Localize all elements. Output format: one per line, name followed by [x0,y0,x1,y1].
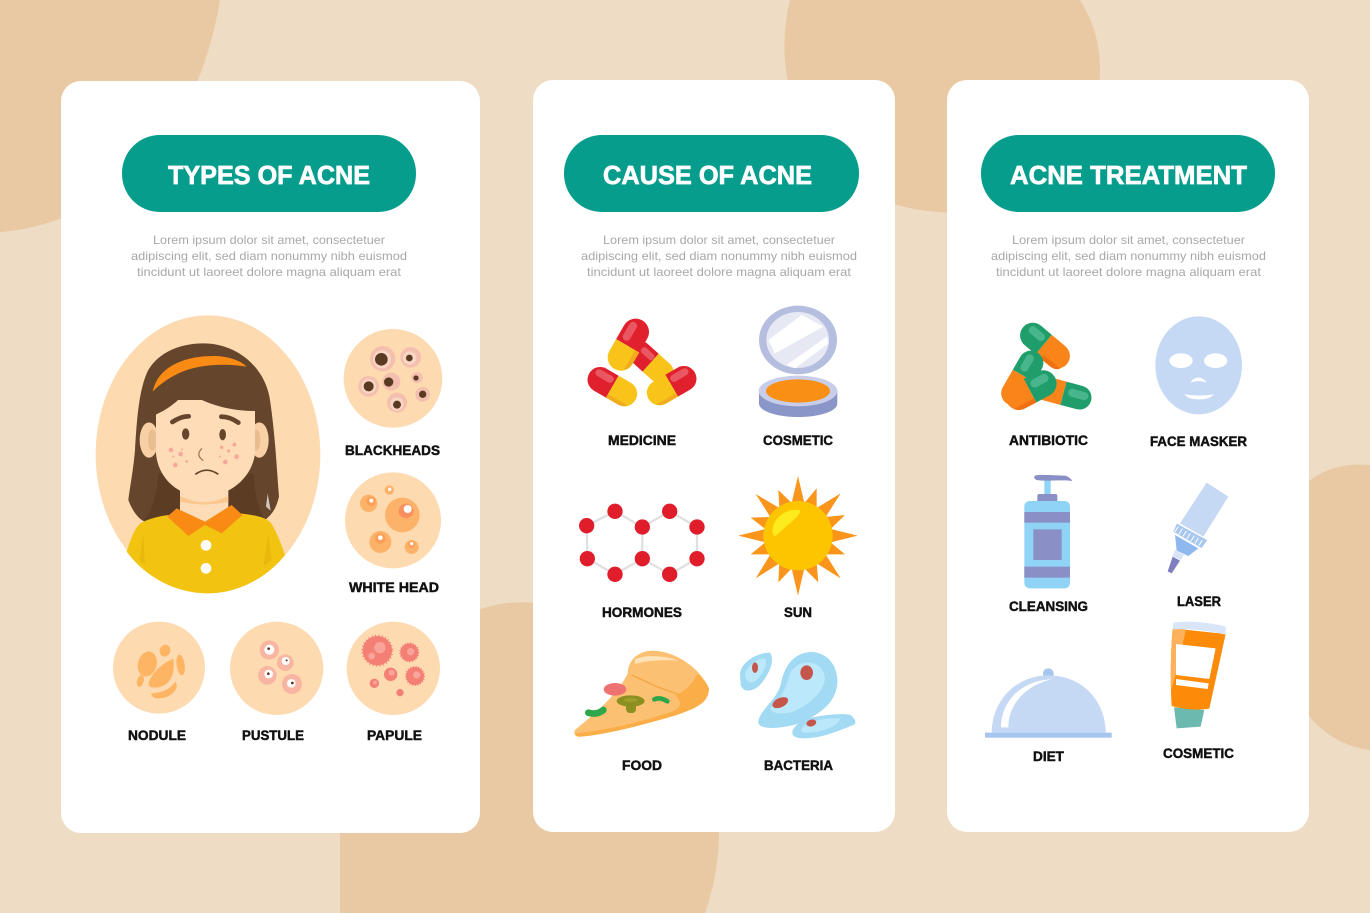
caption: bacteria: BACTERIA [764,758,833,773]
description text: Lorem ipsum dolor sit amet, consectetuer [153,233,385,247]
caption: cosmetic: COSMETIC [763,433,833,448]
description text [131,233,407,279]
caption: diet: DIET [1033,749,1065,764]
caption: medicine: MEDICINE [608,433,676,448]
caption: sun: SUN [784,605,812,620]
icon: pizza slice [574,651,709,737]
heading pill: cause of acne [564,135,859,212]
caption: papule: PAPULE [367,728,422,743]
description text: Lorem ipsum dolor sit amet, consectetuer [1012,233,1245,247]
icon: cleansing bottle [1024,475,1072,588]
caption: food: FOOD [622,758,662,773]
caption: white head: WHITE HEAD [349,580,439,595]
heading pill: cause of acne: CAUSE OF ACNE [603,160,812,190]
panel: types of acne [61,81,480,833]
illustration: girl with acne [96,315,320,593]
icon: medicine capsules [583,314,701,411]
heading pill: acne treatment: ACNE TREATMENT [1010,160,1247,190]
icon: sun [738,476,858,596]
description text [581,233,857,279]
panel: acne treatment [947,80,1309,832]
icon: nodule [113,622,205,714]
icon: hormones molecule [579,504,705,582]
icon: antibiotic capsules [997,318,1094,415]
caption: cosmetic: COSMETIC [1163,746,1234,761]
icon: pustule [230,622,323,715]
icon: blackheads [344,329,442,428]
caption: hormones: HORMONES [602,605,682,620]
caption: blackheads: BLACKHEADS [345,443,440,458]
icon: papule [347,622,440,715]
caption: cleansing: CLEANSING [1009,599,1088,614]
icon: bacteria [740,652,855,738]
description text: adipiscing elit, sed diam nonummy nibh euismod [581,249,857,263]
caption: antibiotic: ANTIBIOTIC [1009,433,1088,448]
description text: Lorem ipsum dolor sit amet, consectetuer [603,233,835,247]
icon: cosmetic tube [1171,622,1226,728]
heading pill: types of acne: TYPES OF ACNE [168,160,370,190]
icon: diet cloche [985,668,1112,738]
icon: laser applicator [1168,483,1228,573]
caption: nodule: NODULE [128,728,186,743]
description text: tincidunt ut laoreet dolore magna aliquam erat [996,265,1262,279]
heading pill: acne treatment [981,135,1275,212]
caption: face masker: FACE MASKER [1150,434,1247,449]
caption: pustule: PUSTULE [242,728,304,743]
icon: face mask [1155,316,1242,414]
description text: tincidunt ut laoreet dolore magna aliquam erat [587,265,852,279]
heading pill: types of acne [122,135,416,212]
caption: laser: LASER [1177,594,1221,609]
description text: adipiscing elit, sed diam nonummy nibh euismod [131,249,407,263]
panel: cause of acne [533,80,895,832]
icon: cosmetic compact [759,306,837,417]
description text [991,233,1266,279]
description text: tincidunt ut laoreet dolore magna aliquam erat [137,265,402,279]
description text: adipiscing elit, sed diam nonummy nibh euismod [991,249,1266,263]
icon: white head [345,472,441,568]
